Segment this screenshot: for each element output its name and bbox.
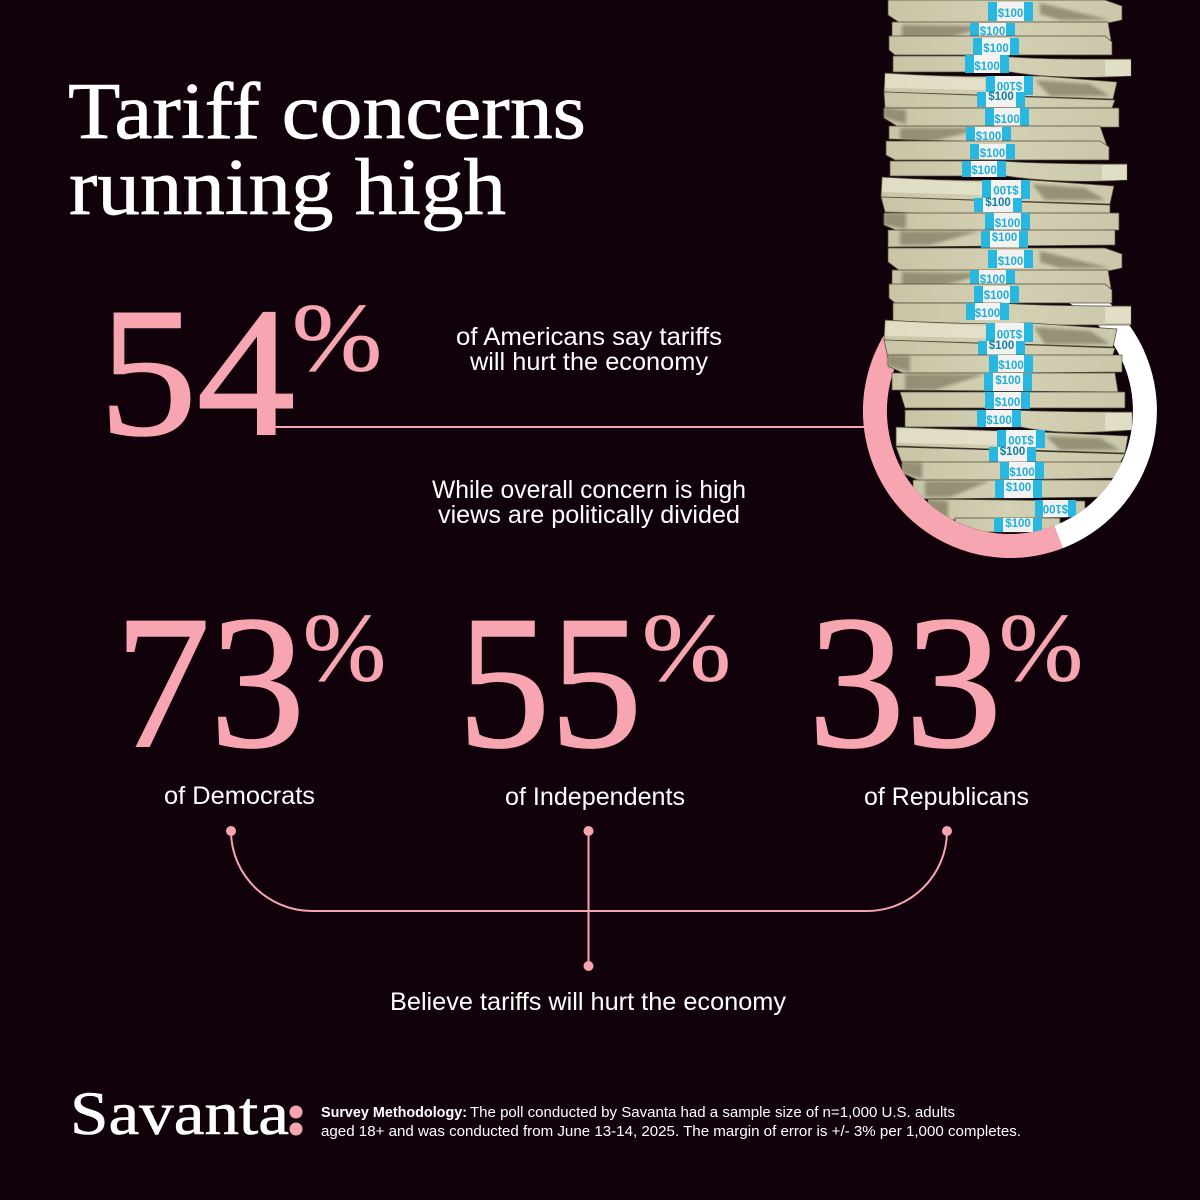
icon: stack of money bundles: $100: [995, 218, 1020, 230]
stat: 33 percent of Republicans: 33: [808, 578, 1002, 788]
icon: stack of money bundles: $100: [993, 183, 1019, 195]
icon: stack of money bundles: $100: [997, 327, 1022, 339]
survey methodology note: [321, 1105, 1021, 1140]
survey methodology note: Survey Methodology:: [321, 1105, 467, 1121]
stat: 73 percent of Democrats: %: [303, 594, 386, 702]
survey methodology note: The poll conducted by Savanta had a sample size of n=1,000 U.S. adults: [470, 1105, 955, 1121]
text: Americans say tariffs will hurt: [456, 323, 722, 376]
stat: 54 percent: 54: [99, 270, 295, 474]
icon: stack of money bundles: $100: [995, 375, 1021, 387]
icon: stack of money bundles: $100: [994, 114, 1020, 126]
text: Americans say tariffs will hurt: of Americans say tariffs: [456, 323, 722, 351]
icon: stack of money bundles: $100: [992, 232, 1017, 244]
icon: stack of money bundles: $100: [1005, 518, 1031, 530]
title: [68, 66, 586, 232]
icon: stack of money bundles: $100: [998, 256, 1023, 268]
title: running high: [69, 142, 506, 232]
donut chart: 54 percent: [875, 276, 1145, 546]
text: politically divided: While overall concern is high: [432, 476, 746, 504]
stat: 73 percent of Democrats: [115, 578, 386, 810]
bracket connector: [226, 826, 952, 971]
icon: stack of money bundles: $100: [984, 290, 1009, 302]
text: believe tariffs will hurt: Believe tariffs will hurt the economy: [390, 988, 786, 1016]
icon: stack of money bundles: $100: [983, 43, 1009, 55]
icon: stack of money bundles: $100: [989, 340, 1014, 352]
icon: stack of money bundles: $100: [975, 308, 1000, 320]
stat: 54 percent: %: [292, 284, 382, 392]
stat: 55 percent of Independents: 55: [458, 578, 642, 788]
icon: stack of money bundles: $100: [980, 274, 1005, 286]
stat: 73 percent of Democrats: of Democrats: [164, 782, 315, 810]
icon: stack of money bundles: $100: [971, 165, 997, 177]
icon: stack of money bundles: $100: [985, 197, 1011, 209]
survey methodology note: aged 18+ and was conducted from June 13-14, 2025. The margin of error is +/- 3% per 1,000 completes.: [321, 1124, 1021, 1140]
text: politically divided: views are politically divided: [438, 501, 740, 529]
icon: stack of money bundles: $100: [1043, 502, 1068, 514]
icon: stack of money bundles: $100: [997, 79, 1022, 91]
stat: 33 percent of Republicans: of Republicans: [864, 783, 1029, 811]
icon: stack of money bundles: $100: [1006, 482, 1031, 494]
icon: stack of money bundles: $100: [976, 131, 1001, 143]
stat: 33 percent of Republicans: %: [999, 594, 1083, 702]
stat: 55 percent of Independents: of Independents: [505, 783, 685, 811]
icon: stack of money bundles: $100: [1008, 433, 1034, 445]
icon: stack of money bundles: $100: [986, 415, 1012, 427]
icon: stack of money bundles: [881, 0, 1132, 532]
text: Americans say tariffs will hurt: will hurt the economy: [469, 348, 709, 376]
leader line from stat to donut: [269, 426, 866, 428]
icon: stack of money bundles: $100: [1000, 446, 1025, 458]
icon: stack of money bundles: $100: [988, 91, 1014, 103]
stat: 73 percent of Democrats: 73: [115, 578, 305, 788]
stat: 55 percent of Independents: %: [642, 594, 731, 702]
stat: 54 percent: [99, 270, 382, 474]
icon: stack of money bundles: $100: [995, 397, 1020, 409]
stat: 33 percent of Republicans: [808, 578, 1083, 811]
icon: stack of money bundles: $100: [998, 360, 1024, 372]
icon: stack of money bundles: $100: [974, 61, 1000, 73]
stat: 55 percent of Independents: [458, 578, 731, 811]
icon: stack of money bundles: $100: [1009, 467, 1035, 479]
title: Tariff concerns: [68, 66, 586, 156]
icon: stack of money bundles: $100: [980, 148, 1005, 160]
icon: stack of money bundles: $100: [980, 26, 1005, 38]
logo: Savanta: Savanta: [70, 1081, 289, 1148]
icon: stack of money bundles: $100: [998, 8, 1023, 20]
text: politically divided: [432, 476, 746, 529]
